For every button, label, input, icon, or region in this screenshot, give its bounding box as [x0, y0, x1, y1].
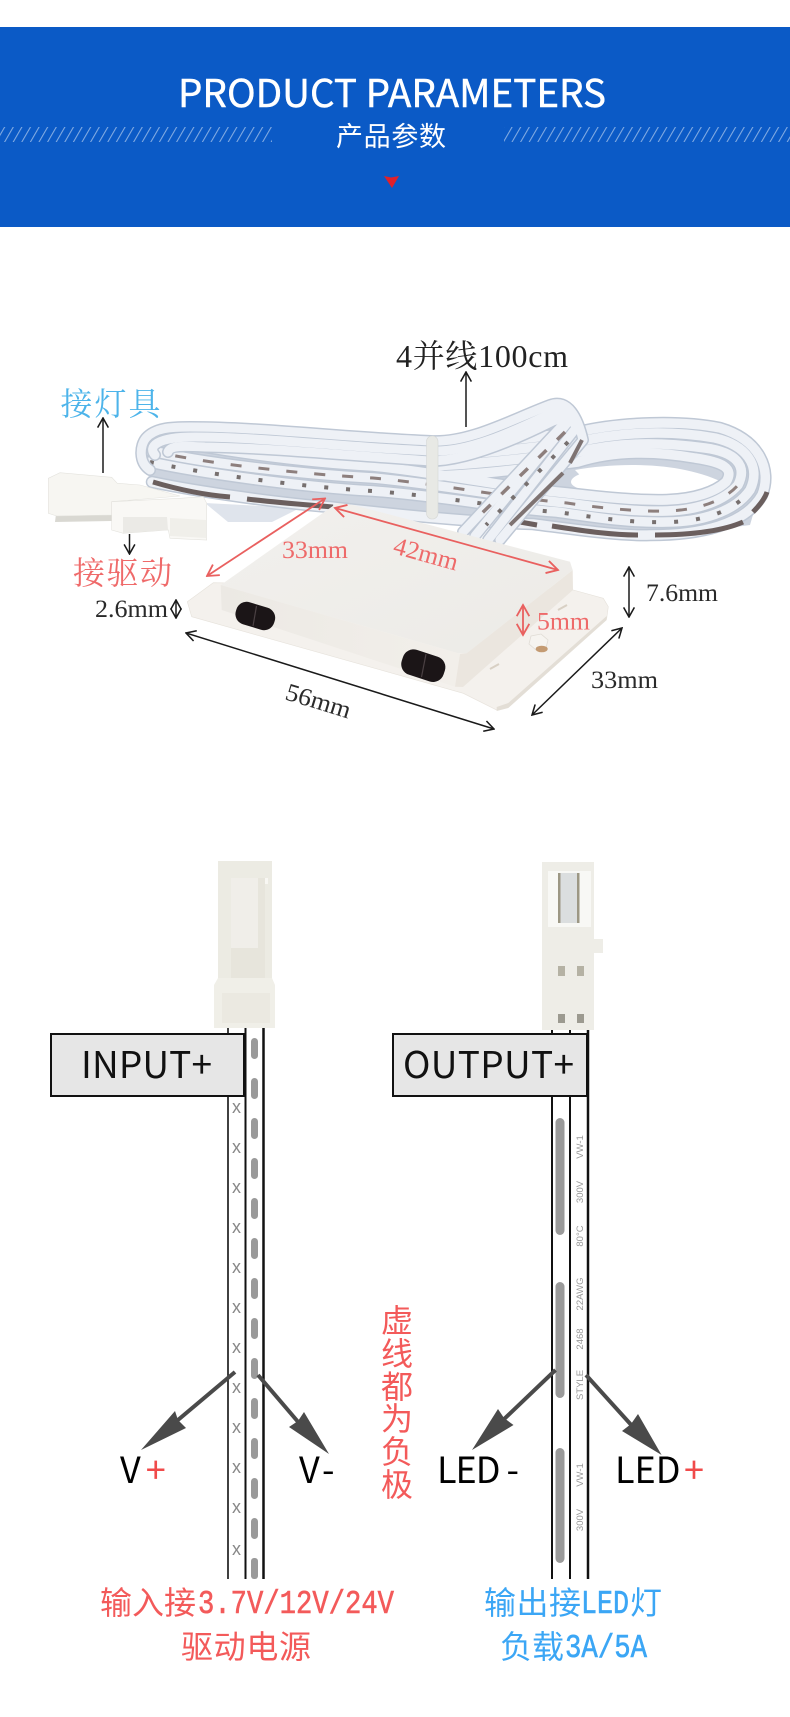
note: dashed lines are negative: 虚: [381, 1296, 413, 1342]
cable tie: [426, 436, 438, 519]
dashed negative conductor: [251, 1038, 258, 1579]
wire print text: STYLE: [575, 1370, 586, 1400]
right and front strands: [148, 423, 765, 535]
x marks on wire: x: [232, 1137, 241, 1157]
dimension labels: 4并线100cm: [396, 338, 568, 374]
label: LED-: LED -: [437, 1442, 519, 1494]
label: LED+: LED: [615, 1442, 681, 1494]
underlay: [145, 425, 766, 540]
screw hole: [529, 634, 548, 650]
x marks on wire: x: [232, 1097, 241, 1117]
note: dashed lines are negative: 线: [381, 1329, 413, 1375]
wire print text: 80°C: [575, 1225, 586, 1247]
dimension labels: 接驱动: [73, 555, 172, 591]
caption: output load: [484, 1578, 662, 1668]
input wire diagram: [51, 861, 394, 1668]
INPUT+ label box: INPUT+: [81, 1035, 212, 1089]
caption: output load: 3A/5A: [565, 1630, 647, 1667]
wire print text: 22AWG: [575, 1278, 586, 1310]
output wire diagram: [393, 862, 704, 1668]
caption: input power: 3.7V/12V/24V: [198, 1586, 394, 1623]
caption: output load: 负载: [500, 1622, 564, 1668]
x marks on wire: x: [232, 1497, 241, 1517]
product photo: sensor with cable: [48, 338, 767, 729]
wire print text: 2468: [575, 1328, 586, 1350]
note: dashed lines are negative: 极: [381, 1460, 413, 1506]
sensor housing: [187, 503, 608, 711]
dimension labels: 接灯具: [60, 386, 162, 422]
caption: input power: 输入接: [100, 1578, 196, 1624]
arrow: LED+: [586, 1375, 662, 1455]
dimension arrows: [103, 372, 629, 729]
label: LED+: +: [684, 1442, 704, 1494]
input connector: [214, 861, 275, 1028]
back strands and diagonal ribbon: [141, 404, 583, 540]
note: dashed lines are negative: 都: [381, 1362, 413, 1408]
decorative hatch left: [0, 127, 272, 142]
caption: input power: 驱动电源: [181, 1622, 311, 1668]
caption: output load: LED: [581, 1586, 629, 1623]
OUTPUT+ label box: OUTPUT+: [403, 1035, 574, 1089]
wire print text: VW-1: [575, 1463, 586, 1487]
wire lines: [227, 1028, 229, 1579]
dimension labels: 5mm: [537, 608, 591, 636]
output connector: [542, 862, 603, 1030]
dimension labels: 42mm: [390, 533, 462, 577]
x marks on wire: x: [232, 1457, 241, 1477]
INPUT+ label box: [51, 1034, 244, 1096]
wire print text: VW-1: [575, 1135, 586, 1159]
note: dashed lines are negative: 为: [381, 1394, 413, 1440]
x marks on wire: x: [232, 1297, 241, 1317]
caption: input power: [100, 1578, 394, 1668]
dimension labels: [60, 338, 719, 724]
x marks on wire: x: [232, 1257, 241, 1277]
x marks on wire: x: [232, 1337, 241, 1357]
connectors on cable end: [48, 473, 207, 540]
sensor windows: [233, 599, 448, 685]
label: V-: V-: [299, 1442, 334, 1494]
arrow: V-: [258, 1375, 329, 1454]
note: dashed lines are negative: 负: [381, 1427, 413, 1473]
icon: red down triangle: [384, 176, 399, 188]
dimension labels: 33mm: [591, 667, 659, 694]
subtitle: 产品参数: [336, 115, 446, 154]
dimension labels: 2.6mm: [95, 596, 169, 623]
wire print text: 300V: [575, 1508, 586, 1531]
dimension labels: 7.6mm: [646, 580, 719, 607]
title: PRODUCT PARAMETERS: [178, 63, 606, 118]
x marks on wire: [232, 1097, 241, 1559]
wire lines: [551, 1030, 553, 1579]
x marks on wire: x: [232, 1539, 241, 1559]
decorative hatch right: [504, 127, 790, 142]
dash and x print rows: [148, 450, 738, 511]
grey conductor bars: [556, 1118, 564, 1563]
x marks on wire: x: [232, 1217, 241, 1237]
dimension labels: 56mm: [282, 679, 355, 724]
wire print text: [575, 1135, 586, 1531]
x marks on wire: x: [232, 1377, 241, 1397]
x marks on wire: x: [232, 1177, 241, 1197]
header banner: [0, 27, 790, 227]
label: V+: V+: [120, 1442, 166, 1494]
dimension labels: 33mm: [282, 537, 349, 564]
arrow: LED-: [472, 1370, 556, 1450]
note: dashed lines are negative: [381, 1296, 413, 1506]
caption: output load: 输出接: [484, 1578, 581, 1624]
caption: output load: 灯: [630, 1578, 662, 1624]
plate slots: [558, 605, 567, 610]
x marks on wire: x: [232, 1417, 241, 1437]
dark print sections: [153, 482, 767, 535]
arrow: V+: [141, 1372, 235, 1450]
wire print text: 300V: [575, 1180, 586, 1203]
cable bundle: [141, 404, 767, 540]
